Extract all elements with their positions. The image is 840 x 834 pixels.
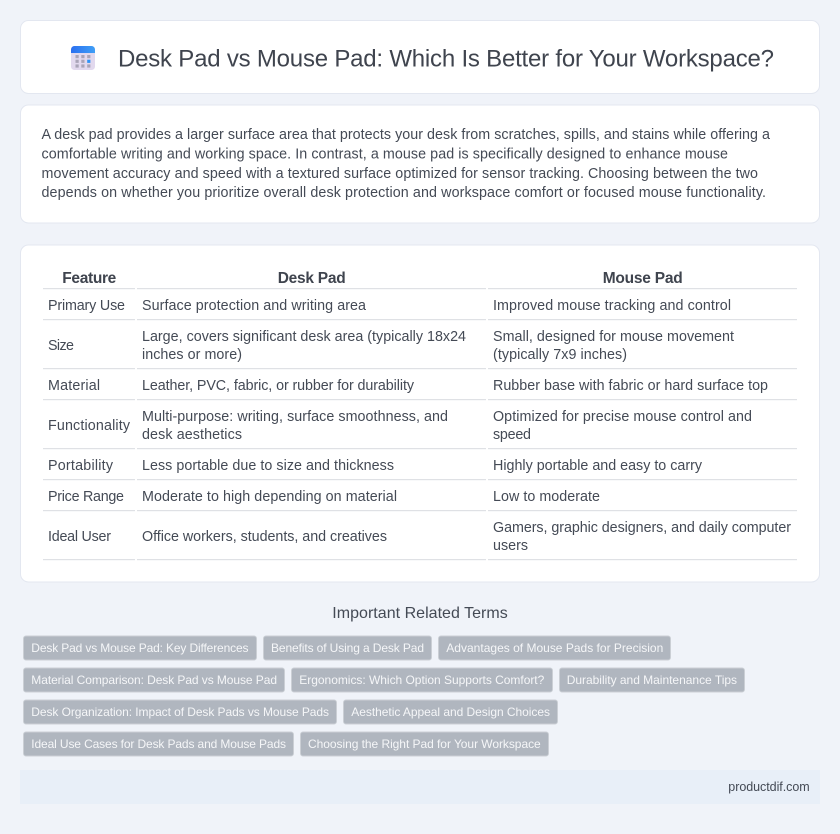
- tag: [24, 732, 294, 756]
- row: price range: Low to moderate: [493, 489, 600, 505]
- header panel: [20, 20, 820, 94]
- row: functionality: Optimized for precise mouse control and: [493, 409, 752, 425]
- row: portability: Portability: [48, 458, 114, 474]
- tag: [264, 636, 432, 660]
- row: ideal user: Ideal User: [48, 529, 111, 545]
- row: material: Leather, PVC, fabric, or rubber for durability: [142, 378, 415, 394]
- row: size: Large, covers significant desk area (typically 18x24: [142, 329, 466, 345]
- tag: [300, 732, 548, 756]
- row: price range: Moderate to high depending on material: [142, 489, 397, 505]
- tag: [438, 636, 670, 660]
- panel: introduction: comfortable writing and working space. In contrast, a mouse pad is specifically designed to enhance mouse: [42, 146, 728, 162]
- footer: [20, 770, 820, 804]
- row: primary use: Improved mouse tracking and control: [493, 298, 731, 314]
- tag: [24, 700, 336, 724]
- row: portability: Less portable due to size and thickness: [142, 458, 394, 474]
- tag: Benefits of Using a Desk Pad: [271, 641, 424, 655]
- row: size: (typically 7x9 inches): [493, 347, 627, 363]
- tag: Ergonomics: Which Option Supports Comfort?: [299, 673, 545, 687]
- tag: Advantages of Mouse Pads for Precision: [446, 641, 663, 655]
- tag: [560, 668, 744, 692]
- table header row: Feature: [62, 270, 117, 287]
- table header row: [62, 270, 683, 287]
- tag: Desk Organization: Impact of Desk Pads vs Mouse Pads: [31, 705, 329, 719]
- tag: [24, 636, 256, 660]
- tag: Ideal Use Cases for Desk Pads and Mouse Pads: [31, 737, 286, 751]
- tag: [292, 668, 552, 692]
- tag: Material Comparison: Desk Pad vs Mouse Pad: [31, 673, 277, 687]
- row: primary use: Surface protection and writing area: [142, 298, 366, 314]
- tag: [344, 700, 558, 724]
- row: price range: Price Range: [48, 489, 124, 505]
- row: portability: Highly portable and easy to carry: [493, 458, 703, 474]
- tag: Durability and Maintenance Tips: [567, 673, 737, 687]
- panel: introduction: depends on whether you prioritize overall desk protection and workspace comfort or focused mouse functionality.: [42, 185, 766, 201]
- row: ideal user: users: [493, 538, 528, 554]
- tag: Aesthetic Appeal and Design Choices: [351, 705, 550, 719]
- footer: productdif.com: [728, 780, 810, 794]
- table header row: Mouse Pad: [603, 270, 683, 287]
- row: size: Small, designed for mouse movement: [493, 329, 734, 345]
- panel: comparison table: [20, 245, 820, 582]
- row: material: Rubber base with fabric or hard surface top: [493, 378, 768, 394]
- row: portability: [48, 458, 703, 474]
- icon: calendar: [71, 46, 95, 70]
- tag: Choosing the Right Pad for Your Workspace: [308, 737, 541, 751]
- row: functionality: [48, 409, 752, 443]
- row: functionality: desk aesthetics: [142, 427, 242, 443]
- row: size: inches or more): [142, 347, 242, 363]
- row: size: [48, 329, 734, 363]
- title: Desk Pad vs Mouse Pad: Which Is Better for Your Workspace?: [118, 46, 774, 72]
- row: ideal user: Gamers, graphic designers, and daily computer: [493, 520, 791, 536]
- row: ideal user: Office workers, students, and creatives: [142, 529, 387, 545]
- row: material: [48, 378, 768, 394]
- panel: introduction: A desk pad provides a larger surface area that protects your desk from scratches, spills, and stains while offering a: [42, 127, 770, 143]
- heading: important related terms: Important Related Terms: [332, 605, 508, 622]
- panel: introduction: movement accuracy and speed with a textured surface optimized for sensor tracking. Choosing between the two: [42, 166, 758, 182]
- row: price range: [48, 489, 600, 505]
- row: size: Size: [48, 338, 74, 354]
- row: primary use: [48, 298, 731, 314]
- panel: introduction: [20, 105, 820, 223]
- row: ideal user: [48, 520, 791, 554]
- row: material: Material: [48, 378, 100, 394]
- row: functionality: speed: [493, 427, 531, 443]
- related terms tags: [24, 636, 744, 756]
- table header row: Desk Pad: [278, 270, 346, 287]
- tag: [24, 668, 284, 692]
- tag: Desk Pad vs Mouse Pad: Key Differences: [31, 641, 248, 655]
- row: functionality: Functionality: [48, 418, 131, 434]
- row: functionality: Multi-purpose: writing, surface smoothness, and: [142, 409, 448, 425]
- row: primary use: Primary Use: [48, 298, 125, 314]
